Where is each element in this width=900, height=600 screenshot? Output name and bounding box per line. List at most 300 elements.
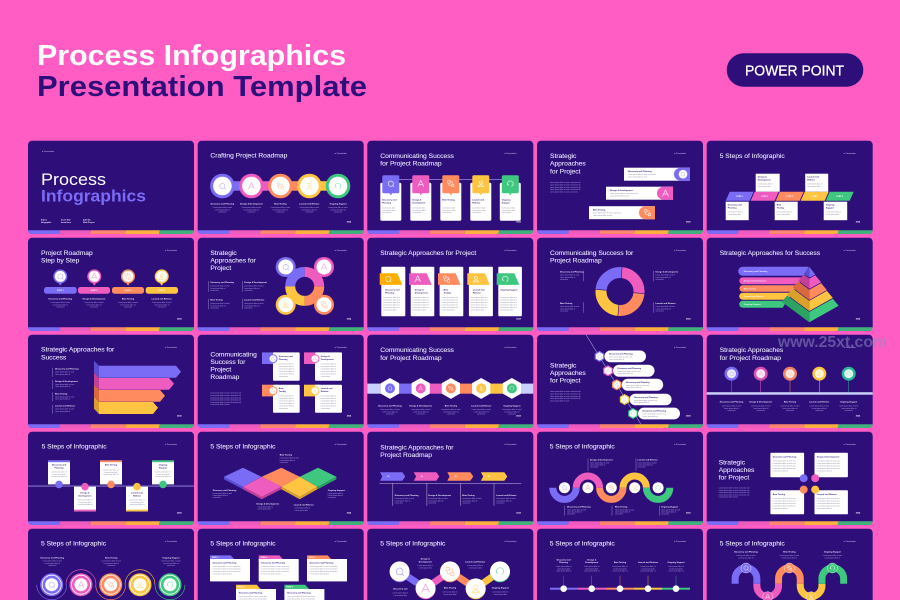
step labels: consectetur <box>124 305 133 308</box>
step labels: Lorem ipsum dolor sit <box>244 208 260 211</box>
info cards: Design & <box>758 177 767 179</box>
tile labels: Lorem ipsum dolor <box>295 510 308 512</box>
cards: Lorem ipsum dolor sit <box>279 363 294 366</box>
slide title: Crafting Project Roadmap <box>210 153 288 160</box>
tabbed cards: Lorem ipsum dolor <box>442 310 455 312</box>
tabbed cards: Testing <box>444 292 452 295</box>
step labels: Ongoing Support <box>329 203 347 206</box>
zigzag labels: Lorem ipsum dolor <box>469 567 482 569</box>
timeline line <box>28 485 194 487</box>
stem labels: Lorem ipsum dolor sit <box>556 565 572 568</box>
serpentine labels: Lorem ipsum dolor sit <box>825 556 841 559</box>
timeline with drop lines <box>379 483 521 506</box>
upper and lower cards: Ongoing <box>159 465 168 467</box>
stem labels: Lorem ipsum dolor sit <box>640 569 656 572</box>
step labels <box>720 401 859 412</box>
step labels: consectetur <box>496 501 505 504</box>
info cards: Lorem ipsum dolor <box>777 214 790 216</box>
wave of half rings <box>553 476 670 499</box>
step labels: Lorem ipsum dolor sit <box>496 499 512 502</box>
zigzag labels: Lorem ipsum dolor <box>394 595 407 597</box>
pills: Lorem ipsum dolor sit amet cons <box>642 413 666 416</box>
five cards: Lorem ipsum dolor <box>442 208 456 210</box>
pills: Discovery and Planning <box>618 367 642 370</box>
slide title <box>210 352 257 381</box>
upper and lower cards: Discovery and <box>52 464 67 467</box>
info cards: Lorem ipsum dolor sit <box>758 183 773 186</box>
tabbed cards: Ongoing Support <box>500 289 518 292</box>
five cards <box>380 175 521 221</box>
four cards: Lorem ipsum dolor sit amet cons <box>773 497 796 500</box>
slide 20: strategic approaches four cards <box>707 432 873 525</box>
slide title: Project Roadmap <box>380 452 432 459</box>
stem labels: Lorem ipsum dolor <box>669 568 683 570</box>
cards: Lorem ipsum <box>279 376 289 378</box>
label list: Discovery and Planning <box>55 368 79 371</box>
step labels: Lorem ipsum dolor sit <box>753 407 769 410</box>
five cards: Lorem ipsum <box>382 212 392 214</box>
slide 22: five steps folder cards <box>198 529 364 600</box>
five cards: Beta Testing <box>442 199 455 202</box>
tabbed cards: Lorem ipsum dolor sit a <box>442 299 458 302</box>
four cards: Lorem ipsum dolor sit amet cons <box>773 502 796 505</box>
slide title: Communicating <box>210 352 257 359</box>
cover heading: Infographics <box>41 187 146 206</box>
ring labels: Beta Testing <box>560 302 573 305</box>
tabbed cards: Lorem ipsum dolor <box>383 310 397 312</box>
upper and lower cards: Lorem ipsum dolor sit <box>103 473 119 476</box>
step labels: consectetur <box>786 409 795 412</box>
info cards: Launch and <box>807 177 820 179</box>
pills: Lorem ipsum dolor sit amet cons <box>609 356 632 359</box>
slide title: Strategic <box>550 153 577 160</box>
pills: Discovery and Planning <box>626 381 650 384</box>
five cards: Lorem ipsum <box>442 212 452 214</box>
slide description: Lorem ipsum dolor sit amet consectetur adi <box>719 489 750 492</box>
pills: Discovery and Planning <box>642 410 667 413</box>
stepped bars: Beta Testing <box>593 209 606 212</box>
tile labels: consectetur <box>213 496 221 499</box>
cards: Lorem ipsum dolor sit <box>321 363 336 366</box>
tile labels: Lorem ipsum dolor sit amet <box>213 492 232 495</box>
five cards: Lorem ipsum <box>472 212 482 214</box>
cards: Lorem ipsum dolor sit <box>321 402 336 405</box>
step ribbon: STEP 1 <box>736 196 744 198</box>
slide title <box>550 362 586 385</box>
tabbed cards: Lorem ipsum dolor sit a <box>471 301 488 304</box>
step labels: Lorem ipsum dolor sit <box>724 407 740 410</box>
slide title: Strategic <box>210 250 237 257</box>
cards: Planning <box>279 359 288 361</box>
four cards: Beta Testing <box>773 493 786 496</box>
cards <box>262 352 342 413</box>
five cards: Design & <box>412 200 422 202</box>
step labels: Lorem ipsum dolor sit amet <box>810 405 829 408</box>
hexagon nodes <box>381 378 521 399</box>
folder cards: Lorem ipsum dolor sit amet consectetur <box>239 595 267 598</box>
serpentine labels: Lorem ipsum dolor sit amet <box>823 554 843 557</box>
info cards <box>726 174 847 220</box>
stem labels: Planning <box>559 562 569 564</box>
ring labels <box>560 271 678 313</box>
upper and lower cards: Lorem ipsum dolor sit <box>77 499 93 502</box>
step labels: Beta Testing <box>122 298 135 301</box>
step ribbon: STEP 5 <box>836 196 844 198</box>
tile labels <box>213 454 345 512</box>
step ribbon <box>726 192 854 201</box>
step labels: Beta Testing <box>274 203 287 206</box>
tabbed cards: Beta <box>444 289 449 292</box>
folder cards: Lorem ipsum dolor sit amet consectetur <box>310 570 338 573</box>
upper labels: Lorem ipsum dolor sit <box>163 562 179 565</box>
slide title: Success <box>41 354 67 361</box>
stepped bars: Lorem ipsum dolor sit amet consectetur <box>628 173 656 176</box>
slide 9: communicating success ring <box>537 238 703 331</box>
layer bars: Discovery and Planning <box>744 270 768 273</box>
upper and lower cards: Lorem ipsum dolor sit <box>103 469 119 472</box>
stem labels: Ongoing Support <box>667 561 685 564</box>
label blocks: Lorem ipsum dolor sit <box>244 304 260 307</box>
tile labels: Launch and Release <box>294 505 315 507</box>
zigzag labels: Lorem ipsum dolor <box>419 567 432 569</box>
slide title: for Project <box>719 475 749 482</box>
wave labels: Lorem ipsum dolor sit amet <box>615 509 635 512</box>
step labels <box>211 203 348 213</box>
layered arrows <box>94 361 181 414</box>
label list: Lorem ipsum dolor sit amet <box>55 395 75 398</box>
stepped bars: Lorem ipsum dolor sit amet <box>593 214 613 217</box>
step labels: Ongoing Support <box>503 405 521 408</box>
slide title: Communicating Success for <box>550 250 634 257</box>
slide description: Lorem ipsum dolor sit amet consectetur adi <box>210 401 242 404</box>
four cards: Design & Development <box>817 456 840 459</box>
cover details: Insert Here <box>61 221 71 224</box>
four cards: Lorem ipsum dolor sit <box>817 470 832 473</box>
five cards: Lorem ipsum dolor <box>472 208 486 210</box>
upper labels: Lorem ipsum dolor sit <box>45 562 60 565</box>
four cards: Lorem ipsum dolor sit amet cons <box>817 467 840 470</box>
layer bars: Beta Testing <box>744 287 757 290</box>
ring labels: consectetur <box>560 309 569 312</box>
tabbed cards: Lorem ipsum dolor sit a <box>383 301 400 304</box>
tile labels: Lorem ipsum dolor sit <box>328 492 343 495</box>
stem labels: Beta Testing <box>614 561 627 564</box>
pills: Lorem ipsum dolor sit <box>609 358 625 361</box>
serpentine labels: Ongoing Support <box>824 551 841 554</box>
wave labels: Lorem ipsum dolor sit <box>638 463 653 466</box>
slide description: Lorem ipsum dolor sit amet consectetur adi <box>550 395 581 398</box>
five cards: Support <box>502 202 510 205</box>
cards: Lorem ipsum dolor sit <box>279 365 294 368</box>
slide title: 5 Steps of Infographic <box>550 444 615 451</box>
five cards: Lorem ipsum dolor <box>502 210 515 212</box>
serpentine labels: Beta Testing <box>783 551 796 554</box>
wave labels: consectetur <box>615 513 624 516</box>
wave labels: Lorem ipsum dolor sit amet <box>590 461 610 464</box>
upper and lower cards: Release <box>133 496 142 498</box>
zigzag chain <box>390 561 510 599</box>
upper and lower cards: Lorem ipsum dolor <box>130 502 144 504</box>
tabbed cards: Lorem ipsum dolor sit a <box>500 306 517 309</box>
cover details <box>41 219 95 224</box>
slide title <box>550 153 586 176</box>
slide title: for Project Roadmap <box>380 355 442 362</box>
cards: Release <box>321 391 329 393</box>
step labels: Beta Testing <box>445 405 458 408</box>
slide title <box>41 250 93 264</box>
slide title: 5 Steps of Infographic <box>42 444 107 451</box>
serpentine labels: Lorem ipsum dolor sit amet <box>780 554 800 557</box>
pills: Lorem ipsum dolor sit <box>642 415 658 418</box>
five cards: Lorem ipsum dolor <box>412 210 426 212</box>
slide title: 5 Steps of Infographic <box>720 540 785 547</box>
step labels: Lorem ipsum dolor sit <box>812 407 827 410</box>
slide title: Approaches <box>719 467 755 474</box>
info cards: Lorem ipsum dolor <box>728 214 741 216</box>
step labels: consectetur <box>305 210 314 213</box>
step labels: consectetur <box>417 412 425 415</box>
step labels: consectetur <box>247 210 256 213</box>
badge: Power Point: POWER POINT <box>745 62 844 79</box>
folder cards: Discovery and Planning <box>239 592 263 595</box>
stepped bars: Discovery and Planning <box>628 170 652 173</box>
ring labels: Discovery and Planning <box>560 271 584 274</box>
slide title: Strategic Approaches <box>720 347 784 354</box>
four cards: Lorem ipsum dolor sit amet cons <box>773 462 796 465</box>
step labels <box>49 298 173 308</box>
upper labels: Lorem ipsum dolor sit amet <box>43 560 62 563</box>
step labels: Launch and Release <box>809 402 830 404</box>
tabbed cards: Lorem ipsum dolor sit a <box>442 301 458 304</box>
ring labels: Launch and Release <box>656 303 676 305</box>
step labels: Lorem ipsum dolor sit amet <box>84 301 104 304</box>
four cards: Lorem ipsum dolor sit amet cons <box>817 505 840 508</box>
info cards: Lorem ipsum dolor sit <box>807 183 823 186</box>
tile labels: Lorem ipsum dolor sit <box>328 494 343 497</box>
stem labels: Lorem ipsum dolor sit <box>584 565 600 568</box>
ring labels: Lorem ipsum dolor sit amet <box>560 274 580 277</box>
label list: Lorem ipsum dolor sit amet <box>55 408 75 411</box>
tile labels: consectetur <box>280 461 288 464</box>
four cards: Lorem ipsum dolor sit amet cons <box>817 462 840 465</box>
step labels: consectetur <box>56 305 65 308</box>
step labels: Design & Development <box>749 401 772 404</box>
step labels: Lorem ipsum dolor sit amet <box>751 405 771 408</box>
step labels: Lorem ipsum dolor sit amet <box>411 408 431 411</box>
step labels: Lorem ipsum dolor sit <box>154 303 170 306</box>
slide title: 5 Steps of Infographic <box>210 444 276 451</box>
zigzag labels: Lorem ipsum dolor sit <box>393 592 408 595</box>
tabbed cards: Design & <box>415 290 424 292</box>
step labels: consectetur <box>757 409 765 412</box>
tabbed cards: Planning <box>385 293 395 295</box>
slide title: Communicating Success <box>380 347 455 354</box>
cover details: Add title <box>83 219 91 222</box>
folder cards: STEP 3 <box>309 557 316 559</box>
centre dots <box>800 474 819 494</box>
zigzag labels <box>393 559 509 597</box>
slide description <box>550 390 581 402</box>
upper and lower cards: Launch and <box>131 493 144 495</box>
cover heading: Process <box>41 170 106 189</box>
pyramid <box>782 267 839 322</box>
slide 12: communicating success cards grid <box>198 335 364 428</box>
step labels: Lorem ipsum dolor sit amet <box>428 497 448 500</box>
step labels: Lorem ipsum dolor sit amet <box>472 408 491 411</box>
upper and lower cards: Design & <box>80 493 90 495</box>
slide 21: five steps concentric circles <box>28 529 194 600</box>
step labels: Lorem ipsum dolor sit amet <box>300 206 320 209</box>
concentric circles <box>37 570 185 600</box>
step labels: consectetur <box>90 305 99 308</box>
five cards: Development <box>412 202 426 205</box>
upper labels: Discovery and Planning <box>41 556 65 559</box>
wave labels: Lorem ipsum dolor sit <box>661 511 677 514</box>
tabbed cards: Lorem ipsum dolor sit a <box>413 304 429 307</box>
slide 11: strategic approaches arrows <box>28 335 194 428</box>
slide description: Lorem ipsum dolor sit amet consectetur adi <box>550 397 581 400</box>
step labels: Design & Development <box>83 298 106 301</box>
folder cards: Lorem ipsum dolor sit amet <box>310 573 329 576</box>
chevron arrows: 02 <box>421 476 424 478</box>
slide title <box>719 459 755 482</box>
cards: Discovery and <box>279 355 294 358</box>
step labels <box>378 405 522 415</box>
slide 10: strategic approaches pyramid <box>707 238 873 331</box>
title: Process Infographics <box>37 40 346 72</box>
tabbed cards: Lorem ipsum dolor sit a <box>442 306 458 309</box>
info cards: Lorem ipsum dolor <box>758 186 771 188</box>
info cards: Lorem ipsum dolor sit <box>777 211 792 214</box>
tile labels: Lorem ipsum dolor sit <box>295 507 310 510</box>
step labels: Lorem ipsum dolor sit <box>462 499 478 502</box>
label blocks: Lorem ipsum dolor sit amet <box>210 285 230 288</box>
info cards: Testing <box>777 206 785 210</box>
cards: Lorem ipsum <box>321 376 331 378</box>
zigzag labels: Lorem ipsum dolor <box>443 594 457 596</box>
zigzag labels: Ongoing Support <box>492 587 509 590</box>
step labels: Lorem ipsum dolor sit amet <box>271 206 291 209</box>
ring labels: consectetur <box>656 278 664 281</box>
ring labels: Lorem ipsum dolor sit amet <box>560 305 580 308</box>
slide description: Lorem ipsum dolor sit amet <box>719 496 738 499</box>
info cards: Discovery and <box>728 204 743 207</box>
label blocks: Lorem ipsum dolor sit amet <box>244 302 264 305</box>
step labels: consectetur <box>447 412 455 415</box>
slide title: 5 Steps of Infographic <box>41 540 107 547</box>
ring labels: Lorem ipsum dolor sit <box>656 276 671 279</box>
slide 18: strategic approaches arrows timeline <box>367 432 533 525</box>
step labels: consectetur <box>845 409 853 412</box>
step labels: Lorem ipsum dolor sit <box>53 303 68 306</box>
zigzag labels: Lorem ipsum dolor sit <box>493 591 508 594</box>
step labels: Lorem ipsum dolor sit <box>413 410 429 413</box>
zigzag labels: Launch and Release <box>465 562 486 564</box>
coloured band <box>367 384 533 394</box>
step labels: Lorem ipsum dolor sit amet <box>395 497 415 500</box>
step labels: consectetur <box>428 501 437 504</box>
four cards: Lorem ipsum dolor sit <box>817 507 832 510</box>
info cards: Beta <box>777 204 782 207</box>
slide title <box>380 153 455 168</box>
label blocks: consectetur <box>244 306 253 309</box>
pills <box>595 350 680 419</box>
step labels: Design & Development <box>240 203 263 206</box>
upper and lower cards: Lorem ipsum dolor sit <box>51 471 67 474</box>
tabbed cards: Lorem ipsum dolor sit a <box>471 304 488 307</box>
four cards: Lorem ipsum dolor sit amet cons <box>817 497 840 500</box>
slide 25: five steps serpentine <box>707 529 873 600</box>
ring labels: Lorem ipsum dolor sit <box>560 276 576 279</box>
serpentine labels: Lorem ipsum dolor sit <box>738 556 754 559</box>
tabbed cards: Lorem ipsum dolor sit a <box>500 299 517 302</box>
tabbed cards: Lorem ipsum dolor sit a <box>413 299 429 302</box>
stem labels: Lorem ipsum dolor <box>557 568 571 570</box>
tabbed cards: Lorem ipsum dolor sit a <box>383 304 400 307</box>
four cards: Lorem ipsum dolor sit <box>773 507 788 510</box>
step labels: consectetur <box>727 409 736 412</box>
layer bars: Launch and Release <box>744 296 765 298</box>
info cards: Planning <box>728 208 737 210</box>
zigzag labels: Discovery and <box>393 588 408 591</box>
folder cards: Lorem ipsum dolor sit amet consectetur <box>261 568 290 571</box>
slide title: 5 Steps of Infographic <box>550 540 615 547</box>
slide 19: five steps wave <box>537 432 703 525</box>
step labels: Design & Development <box>409 405 432 408</box>
label blocks: consectetur <box>210 289 219 292</box>
cards: Lorem ipsum dolor sit <box>279 405 294 408</box>
pills: Lorem ipsum dolor sit <box>634 401 650 404</box>
step labels: consectetur <box>158 305 166 308</box>
step labels: Beta Testing <box>462 494 475 497</box>
tabbed cards: Lorem ipsum dolor sit a <box>383 306 400 309</box>
step labels: Discovery and Planning <box>211 203 235 206</box>
step labels: Lorem ipsum dolor sit amet <box>152 301 172 304</box>
tabbed cards: Launch and <box>473 290 485 292</box>
slide title: Step by Step <box>41 257 80 264</box>
upper and lower cards: Development <box>78 495 92 498</box>
pin markers <box>53 269 169 286</box>
stem labels: Lorem ipsum dolor sit <box>556 569 572 572</box>
step labels: consectetur <box>386 412 395 415</box>
step labels: Design & Development <box>428 494 451 497</box>
ring labels: Lorem ipsum dolor sit amet <box>656 305 675 308</box>
ring labels: Lorem ipsum dolor sit <box>560 307 576 310</box>
step labels: consectetur <box>334 210 343 213</box>
four cards: Lorem ipsum dolor sit amet cons <box>817 465 840 468</box>
cards: Lorem ipsum dolor sit <box>279 370 294 373</box>
step labels: Discovery and Planning <box>49 298 73 301</box>
cards: Beta <box>279 387 284 390</box>
folder cards: Discovery and Planning <box>261 562 286 565</box>
label blocks: consectetur <box>244 289 253 292</box>
serpentine labels <box>734 551 843 559</box>
step labels: consectetur <box>815 409 824 412</box>
cards: Lorem ipsum dolor sit <box>279 368 294 371</box>
slide description: Lorem ipsum dolor sit amet <box>550 399 570 402</box>
label list: Lorem ipsum dolor sit <box>55 397 71 400</box>
slide 4: strategic approaches bars <box>537 141 703 234</box>
zigzag labels: Lorem ipsum dolor sit <box>442 591 458 594</box>
upper and lower cards: Support <box>159 467 167 470</box>
folder cards: Lorem ipsum dolor sit amet consectetur <box>261 570 290 573</box>
step labels: consectetur <box>477 412 486 415</box>
step labels: Lorem ipsum dolor sit amet <box>441 408 461 411</box>
step labels: Lorem ipsum dolor sit amet <box>780 405 800 408</box>
wave labels: Design & Development <box>590 458 613 461</box>
tabbed cards: Lorem ipsum dolor sit a <box>500 296 517 299</box>
pills: Lorem ipsum dolor sit amet cons <box>626 384 649 387</box>
